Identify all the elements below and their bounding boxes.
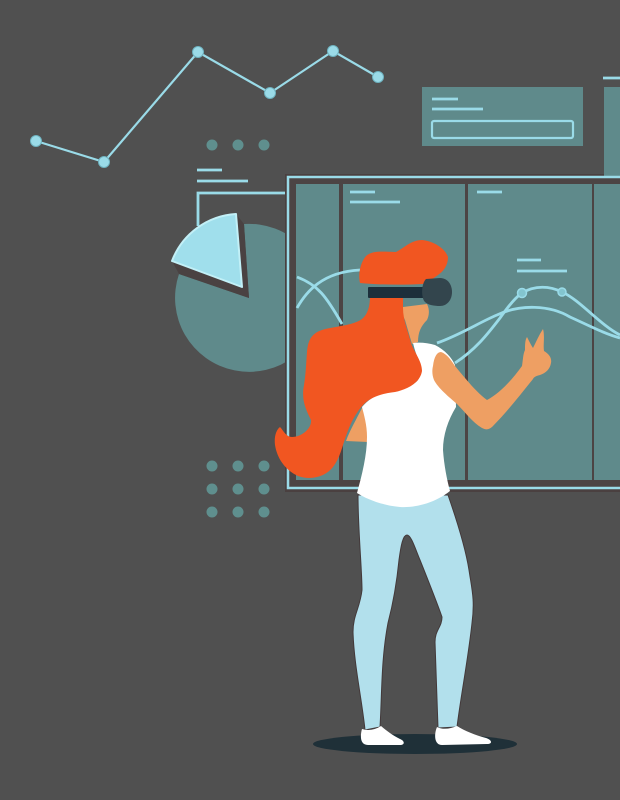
woman figure <box>275 240 551 745</box>
top right panel <box>604 87 620 176</box>
left shoe <box>361 726 404 745</box>
line chart <box>30 46 384 168</box>
leggings <box>353 495 473 730</box>
long hair <box>275 296 422 478</box>
top right small line <box>603 77 620 79</box>
hair top <box>359 240 448 285</box>
VR headset strap <box>368 287 426 298</box>
chart markers <box>518 288 566 298</box>
right shoe <box>435 726 491 745</box>
board columns <box>296 184 620 480</box>
VR goggles <box>422 278 452 306</box>
shirt <box>357 343 456 507</box>
far arm <box>346 405 368 442</box>
wave charts <box>297 270 620 363</box>
ground shadow <box>313 734 517 754</box>
main dashboard board <box>285 87 620 492</box>
top panel <box>422 87 583 146</box>
pie chart label lines <box>197 170 248 181</box>
neck and face <box>402 304 429 344</box>
near arm <box>432 329 551 429</box>
top dots row <box>206 140 270 150</box>
pie chart <box>172 214 323 372</box>
pie chart frame <box>198 193 288 226</box>
column heading lines <box>350 192 567 271</box>
dots grid <box>206 460 270 518</box>
